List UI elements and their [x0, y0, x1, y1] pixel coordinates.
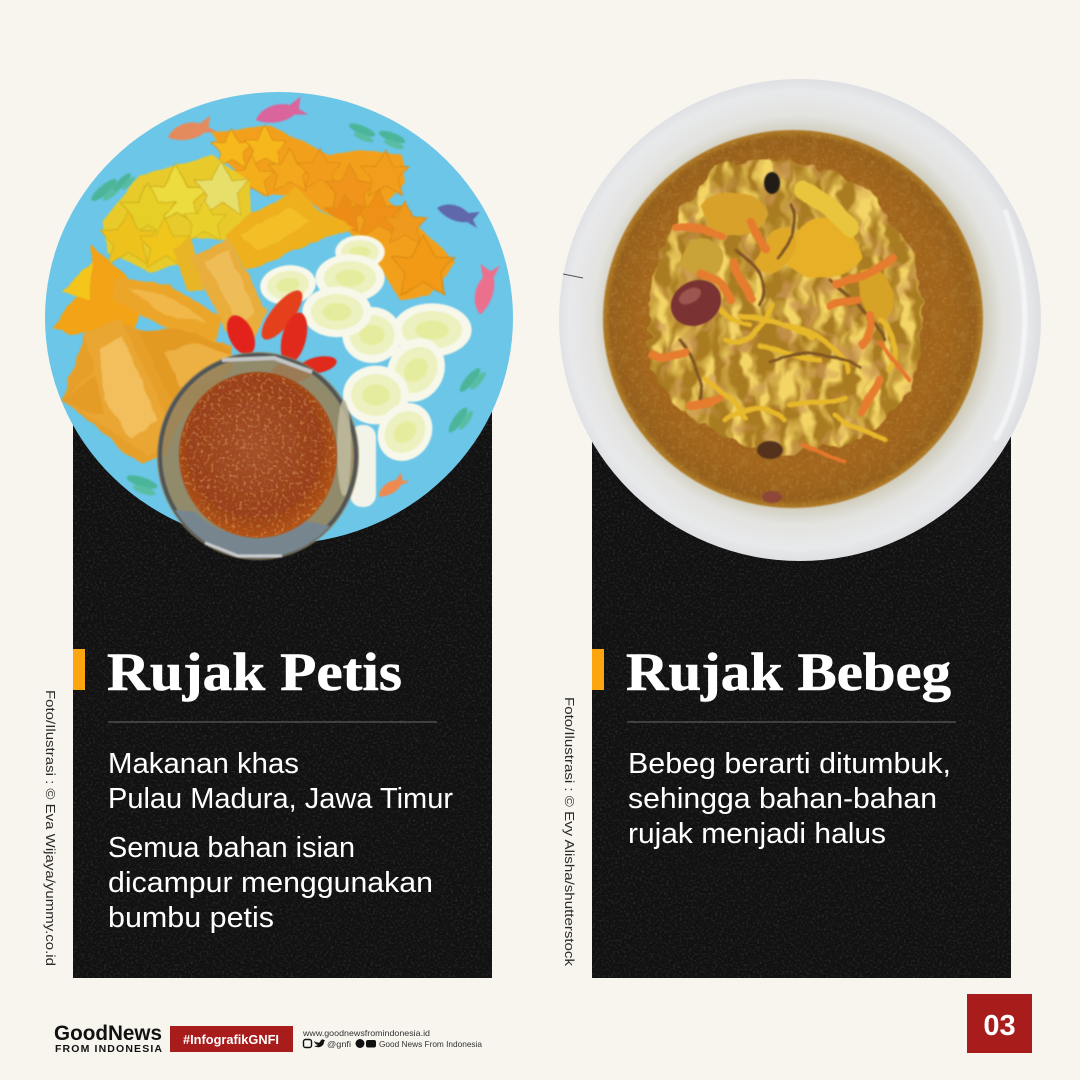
logo: GoodNews From Indonesia — [54, 1022, 162, 1055]
photo credit: rujak petis: Foto/Ilustrasi : © Eva Wijaya/yummy.co.id — [43, 690, 58, 966]
hashtag badge — [170, 1026, 293, 1052]
photo: plate of rujak petis — [45, 92, 513, 560]
photo: bowl of rujak bebeg — [559, 79, 1041, 561]
website and social handles — [302, 1028, 482, 1049]
panel: rujak bebeg — [592, 436, 1011, 978]
icon: twitter — [314, 1039, 325, 1047]
text block: rujak bebeg description — [628, 748, 951, 850]
icon: facebook — [356, 1039, 364, 1048]
text block: rujak bebeg description: sehingga bahan-bahan — [628, 783, 937, 815]
accent bar: rujak petis — [73, 649, 85, 690]
melon slice — [172, 187, 355, 292]
red chillies — [221, 285, 338, 382]
text block: rujak petis description: Makanan khas — [108, 748, 299, 780]
website and social handles: www.goodnewsfromindonesia.id — [302, 1028, 430, 1038]
white bowl — [559, 79, 1041, 561]
plate — [45, 92, 513, 544]
star fruit, orange — [211, 125, 456, 300]
star fruit, pale yellow — [100, 155, 252, 272]
hashtag badge: #InfografikGNFI — [183, 1033, 279, 1047]
heading: rujak bebeg: Rujak Bebeg — [626, 642, 951, 702]
icon: instagram — [304, 1040, 312, 1048]
page number — [967, 994, 1032, 1053]
page number: 03 — [983, 1010, 1016, 1042]
text block: rujak bebeg description: Bebeg berarti ditumbuk, — [628, 748, 951, 780]
plate fish and lily decorations — [89, 96, 503, 500]
accent bar: rujak bebeg — [592, 649, 604, 690]
soup — [603, 130, 983, 508]
orange star wedge — [53, 245, 142, 335]
text block: rujak petis description: Semua bahan isian — [108, 832, 355, 864]
text block: rujak petis description: Pulau Madura, Jawa Timur — [108, 783, 453, 815]
red onion and dark spice — [663, 172, 783, 503]
cucumber slices — [255, 235, 472, 507]
fried tofu pieces — [62, 238, 267, 465]
panel: rujak petis — [73, 412, 492, 978]
text block: rujak petis description: bumbu petis — [108, 902, 274, 934]
logo: GoodNews From Indonesia: GoodNews — [54, 1022, 162, 1045]
icon: youtube — [366, 1040, 376, 1048]
photo credit: rujak bebeg: Foto/Ilustrasi : © Evy Alisha/shutterstock — [562, 697, 577, 967]
website and social handles: Good News From Indonesia — [379, 1039, 482, 1049]
shredded mango mound — [646, 158, 926, 464]
glass sauce bowl — [157, 352, 359, 560]
logo: GoodNews From Indonesia: FROM INDONESIA — [55, 1043, 162, 1055]
text block: rujak petis description: dicampur menggunakan — [108, 867, 433, 899]
text block: rujak bebeg description: rujak menjadi halus — [628, 818, 886, 850]
heading: rujak petis: Rujak Petis — [107, 642, 402, 702]
text block: rujak petis description — [108, 748, 453, 934]
website and social handles: @gnfi — [327, 1039, 351, 1049]
petis sauce — [179, 372, 337, 538]
